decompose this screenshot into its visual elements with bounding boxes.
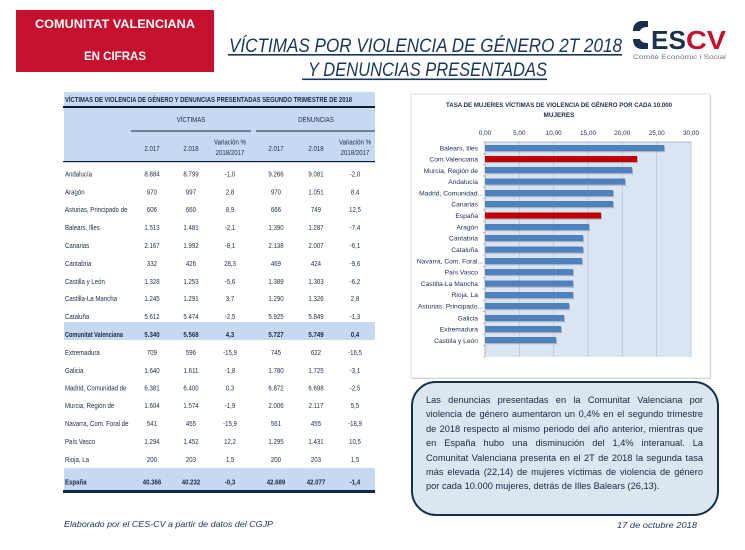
row: Andalucía: -1,0 xyxy=(225,171,235,179)
row: Canarias: -6,1 xyxy=(350,242,360,250)
chart category labels: Cantabria xyxy=(449,236,478,243)
chart panel: tasa de mujeres víctimas xyxy=(411,94,711,379)
row: Galicia: 1.611 xyxy=(184,367,199,375)
row: Cantabria xyxy=(65,260,360,268)
row: Comunitat Valenciana (highlight): 5.727 xyxy=(268,331,284,339)
row: Balears: 1.513 xyxy=(144,224,160,232)
row: Madrid: 6.400 xyxy=(183,385,199,393)
plot area xyxy=(485,142,691,357)
chart category labels: Com.Valenciana xyxy=(429,156,478,164)
row: Balears: 1.390 xyxy=(268,224,284,232)
row: Navarra: -15,9 xyxy=(223,420,237,428)
chart x axis labels xyxy=(479,130,699,137)
row: Extremadura: 596 xyxy=(186,349,196,357)
row: Cataluña: 5.849 xyxy=(308,313,324,321)
row: Extremadura: 709 xyxy=(147,349,157,357)
row: Murcia xyxy=(65,402,359,410)
chart category labels: Madrid, Comunidad... xyxy=(419,190,483,198)
row: Andalucía: Andalucía xyxy=(65,171,92,179)
row: Galicia: Galicia xyxy=(65,367,84,375)
row: Aragón: Aragón xyxy=(65,189,85,197)
row: Rioja: 203 xyxy=(186,456,196,464)
table header: DENUNCIAS xyxy=(298,116,334,124)
row: País Vasco: 1.295 xyxy=(268,438,284,446)
row: Castilla-La Mancha: 1.290 xyxy=(268,295,284,303)
chart x axis labels: 10,00 xyxy=(546,130,562,137)
row: Navarra xyxy=(65,420,362,428)
row: España (total): -0,3 xyxy=(225,479,235,487)
row: Murcia: 5,5 xyxy=(351,402,359,410)
row: Cantabria: Cantabria xyxy=(65,260,91,268)
row: Cataluña: -2,5 xyxy=(225,313,235,321)
row: Cataluña: Cataluña xyxy=(65,313,89,321)
row: Balears: -7,4 xyxy=(350,224,360,232)
row: Extremadura: -16,5 xyxy=(348,349,362,357)
row: Canarias: -8,1 xyxy=(225,242,235,250)
row: España (total): 42.689 xyxy=(267,479,285,487)
row: País Vasco: 1.452 xyxy=(183,438,199,446)
table: víctimas y denuncias xyxy=(63,92,375,493)
chart bars shadow xyxy=(486,146,665,344)
row: Rioja xyxy=(65,456,359,464)
footer date: 17 de octubre 2018 xyxy=(617,520,697,530)
row: País Vasco: 12,2 xyxy=(224,438,236,446)
chart x axis labels: 15,00 xyxy=(580,130,596,137)
row: España (total): -1,4 xyxy=(350,479,360,487)
chart category labels: Andalucía xyxy=(448,179,478,186)
logo: CES-CV: Comitè Econòmic i Social xyxy=(633,54,727,61)
chart category labels: Murcia, Región de xyxy=(424,168,478,175)
row: España (total) xyxy=(63,468,375,493)
row: España (total): 40.366 xyxy=(143,479,161,487)
row: Comunitat Valenciana (highlight): 4,3 xyxy=(226,331,234,339)
row: Murcia: 1.574 xyxy=(183,402,199,410)
row: Balears: 1.287 xyxy=(308,224,324,232)
table header: VÍCTIMAS xyxy=(177,114,206,124)
row: País Vasco: País Vasco xyxy=(65,438,95,446)
row: Aragón: 970 xyxy=(271,189,281,197)
row: Rioja: 1,5 xyxy=(226,456,234,464)
row: Andalucía xyxy=(65,171,360,179)
row: Galicia: -1,8 xyxy=(225,367,235,375)
row: Rioja: 1,5 xyxy=(351,456,359,464)
row: Balears: Balears, Illes xyxy=(65,224,100,232)
row: Asturias: 12,5 xyxy=(349,206,361,214)
row: Aragón: 2,8 xyxy=(226,189,234,197)
chart category labels xyxy=(417,146,483,345)
row: Castilla y León: 1.303 xyxy=(308,278,324,286)
callout text xyxy=(426,395,703,491)
row: Asturias: 660 xyxy=(186,206,196,214)
row: Madrid: 6.381 xyxy=(144,385,160,393)
row: Navarra: 541 xyxy=(147,420,157,428)
row: Cantabria: 426 xyxy=(186,260,196,268)
row: Canarias: Canarias xyxy=(65,242,90,250)
chart category labels: País Vasco xyxy=(445,270,478,276)
row: Aragón: 1.051 xyxy=(308,189,324,197)
row: España (total): 42.077 xyxy=(307,479,325,487)
row: Castilla y León: 1.389 xyxy=(268,278,284,286)
row: Castilla y León xyxy=(65,278,360,286)
logo: CES-CV: CV xyxy=(686,25,727,55)
chart title xyxy=(446,100,672,119)
row: Murcia: Murcia, Región de xyxy=(65,402,114,410)
row: Castilla-La Mancha: Castilla-La Mancha xyxy=(65,295,117,303)
table header: 2.018 xyxy=(308,145,324,153)
chart x axis labels: 5,00 xyxy=(513,130,526,137)
table header: Variación % xyxy=(339,139,371,147)
row: Cantabria: -9,6 xyxy=(350,260,360,268)
row: Asturias: 749 xyxy=(311,206,321,214)
chart category labels: Cataluña xyxy=(451,247,478,254)
row: Galicia xyxy=(65,367,360,375)
row: Asturias: 8,9 xyxy=(226,206,234,214)
row: Murcia: -1,9 xyxy=(225,402,235,410)
row: Comunitat Valenciana (highlight): 5.749 xyxy=(308,331,324,339)
row: Navarra: 561 xyxy=(271,420,281,428)
callout text: Comunitat Valenciana presenta en el 2T de 2018 la segunda tasa xyxy=(426,453,703,463)
row: Castilla-La Mancha xyxy=(65,295,359,303)
table header xyxy=(63,108,375,162)
row: Asturias: Asturias, Principado de xyxy=(65,206,128,214)
row: Cataluña xyxy=(65,313,360,321)
row: Aragón: 8,4 xyxy=(351,189,359,197)
logo: CES-CV xyxy=(633,21,727,61)
row: Castilla y León: -6,2 xyxy=(350,278,360,286)
row: Aragón xyxy=(65,189,359,197)
row: Galicia: -3,1 xyxy=(350,367,360,375)
row: Cataluña: 5.925 xyxy=(268,313,284,321)
row: Rioja: 203 xyxy=(311,456,321,464)
row: Canarias: 2.167 xyxy=(144,242,160,250)
chart category labels: España xyxy=(455,213,478,220)
row: Balears xyxy=(65,224,360,232)
row: Cataluña: 5.474 xyxy=(183,313,199,321)
row: Castilla y León: 1.253 xyxy=(183,278,199,286)
row: Castilla y León: Castilla y León xyxy=(65,278,105,286)
chart x axis labels: 20,00 xyxy=(614,130,631,137)
row: Balears: -2,1 xyxy=(225,224,235,232)
row: España (total): 40.232 xyxy=(182,479,200,487)
row: Navarra: 455 xyxy=(186,420,196,428)
row: Navarra: Navarra, Com. Foral de xyxy=(65,420,129,428)
row: Madrid: -2,5 xyxy=(350,385,360,393)
chart category labels: Canarias xyxy=(451,202,479,208)
callout text: de 2018 respecto al mismo periodo del año anterior, mientras que xyxy=(426,424,703,434)
row: Canarias: 2.007 xyxy=(308,242,324,250)
row: País Vasco xyxy=(65,438,361,446)
row: Aragón: 997 xyxy=(186,189,196,197)
row: Asturias xyxy=(65,206,361,214)
row: Rioja: 200 xyxy=(271,456,281,464)
row: Murcia: 2.117 xyxy=(309,402,324,410)
table header: 2.018 xyxy=(183,145,199,153)
header badge: Comunitat Valenciana en cifras: EN CIFRAS xyxy=(84,51,146,63)
chart category labels: Balears, Illes xyxy=(440,146,479,152)
row: Extremadura: Extremadura xyxy=(65,349,100,357)
row: Madrid: 0,3 xyxy=(226,385,234,393)
row: Castilla-La Mancha: 2,8 xyxy=(351,295,359,303)
header badge: Comunitat Valenciana en cifras xyxy=(16,10,214,72)
row: Extremadura: 622 xyxy=(311,349,321,357)
callout text: en España hubo una disminución del 1,4% interanual. La xyxy=(426,438,703,448)
row: Extremadura: 745 xyxy=(271,349,281,357)
chart category labels: Extremadura xyxy=(440,326,478,334)
chart x axis labels: 0,00 xyxy=(479,130,492,137)
chart category labels: Rioja, La xyxy=(452,292,478,299)
row: Cantabria: 332 xyxy=(147,260,157,268)
row: Madrid: Madrid, Comunidad de xyxy=(65,385,127,393)
row: Andalucía: -2,0 xyxy=(350,171,360,179)
row: Cantabria: 424 xyxy=(311,260,321,268)
row: Murcia: 1.604 xyxy=(144,402,160,410)
row: País Vasco: 10,5 xyxy=(349,438,361,446)
chart bars xyxy=(485,145,664,343)
chart category labels: Galicia xyxy=(458,315,478,322)
row: Castilla-La Mancha: 1.291 xyxy=(183,295,199,303)
callout text: Las denuncias presentadas en la Comunitat Valenciana por xyxy=(426,395,703,405)
title xyxy=(228,36,622,81)
row: Cataluña: 5.612 xyxy=(144,313,160,321)
chart title: MUJERES xyxy=(544,112,575,119)
chart category labels: Castilla y León xyxy=(434,338,478,345)
row: Cataluña: -1,3 xyxy=(350,313,360,321)
title: Y DENUNCIAS PRESENTADAS xyxy=(308,60,547,81)
row: Comunitat Valenciana (highlight) xyxy=(64,322,375,340)
title: VÍCTIMAS POR VIOLENCIA DE GÉNERO 2T 2018 xyxy=(229,36,622,57)
row: Castilla-La Mancha: 1.326 xyxy=(308,295,324,303)
row: Comunitat Valenciana (highlight): 0,4 xyxy=(351,331,359,339)
row: Galicia: 1.725 xyxy=(308,367,324,375)
callout box background xyxy=(412,382,718,515)
chart category labels: Asturias, Principado... xyxy=(418,304,483,310)
row: Asturias: 606 xyxy=(147,206,157,214)
row: Castilla y León: 1.328 xyxy=(144,278,160,286)
logo: CES-CV: ES xyxy=(651,25,686,55)
row: Madrid: 6.872 xyxy=(268,385,284,393)
row: Cantabria: 469 xyxy=(271,260,281,268)
row: Navarra: -18,9 xyxy=(348,420,362,428)
row: Rioja: 200 xyxy=(147,456,157,464)
row: Comunitat Valenciana (highlight): 5.340 xyxy=(144,331,160,339)
row: Canarias: 1.992 xyxy=(183,242,199,250)
row: Andalucía: 9.266 xyxy=(268,171,284,179)
callout text: más elevada (22,14) de mujeres víctimas de violencia de género xyxy=(426,467,703,477)
row: Castilla-La Mancha: 3,7 xyxy=(226,295,234,303)
footer source: Elaborado por el CES-CV a partir de datos del CGJP xyxy=(64,519,273,529)
row: Canarias: 2.138 xyxy=(268,242,284,250)
row: Galicia: 1.640 xyxy=(144,367,160,375)
callout text: por cada 10.000 mujeres, detrás de Illes Balears (26,13). xyxy=(426,481,659,491)
row: Extremadura: -15,9 xyxy=(223,349,237,357)
chart title: TASA DE MUJERES VÍCTIMAS DE VIOLENCIA DE GÉNERO POR CADA 10.000 xyxy=(446,100,672,109)
row: Andalucía: 8.799 xyxy=(183,171,199,179)
chart category labels: Navarra, Com. Foral... xyxy=(417,258,483,265)
row: Canarias xyxy=(65,242,360,250)
header badge: Comunitat Valenciana en cifras: COMUNITAT VALENCIANA xyxy=(35,19,195,31)
row: Galicia: 1.780 xyxy=(268,367,284,375)
table title xyxy=(63,92,375,108)
table header: Variación % xyxy=(214,139,246,147)
table title: VÍCTIMAS DE VIOLENCIA DE GÉNERO Y DENUNCIAS PRESENTADAS SEGUNDO TRIMESTRE DE 2018 xyxy=(65,95,352,104)
row: Andalucía: 8.884 xyxy=(144,171,160,179)
row: Asturias: 666 xyxy=(271,206,281,214)
row: Madrid: 6.698 xyxy=(308,385,324,393)
row: Andalucía: 9.081 xyxy=(308,171,324,179)
row: Comunitat Valenciana (highlight): 5.568 xyxy=(183,331,199,339)
row: Comunitat Valenciana (highlight): Comunitat Valenciana xyxy=(65,331,123,339)
table header: 2018/2017 xyxy=(341,149,370,157)
row: Aragón: 970 xyxy=(147,189,157,197)
table header: 2.017 xyxy=(268,145,284,153)
table header: 2.017 xyxy=(144,145,160,153)
row: Murcia: 2.006 xyxy=(268,402,284,410)
row: País Vasco: 1.294 xyxy=(144,438,160,446)
row: Balears: 1.481 xyxy=(183,224,199,232)
chart x axis labels: 25,00 xyxy=(649,130,665,137)
chart category labels: Castilla-La Mancha xyxy=(421,281,478,288)
row: España (total): España xyxy=(65,479,87,487)
callout text: violencia de género aumentaron un 0,4% en el segundo trimestre xyxy=(426,409,703,419)
row: País Vasco: 1.431 xyxy=(308,438,324,446)
row: Castilla-La Mancha: 1.245 xyxy=(144,295,160,303)
row: Navarra: 455 xyxy=(311,420,321,428)
chart category labels: Aragón xyxy=(456,224,478,231)
row: Cantabria: 28,3 xyxy=(224,260,236,268)
row: Extremadura xyxy=(65,349,362,357)
row: Castilla y León: -5,6 xyxy=(225,278,235,286)
chart x axis labels: 30,00 xyxy=(683,130,699,137)
row: Rioja: Rioja, La xyxy=(65,456,89,464)
row: Madrid xyxy=(65,385,360,393)
table header: 2018/2017 xyxy=(216,149,245,157)
